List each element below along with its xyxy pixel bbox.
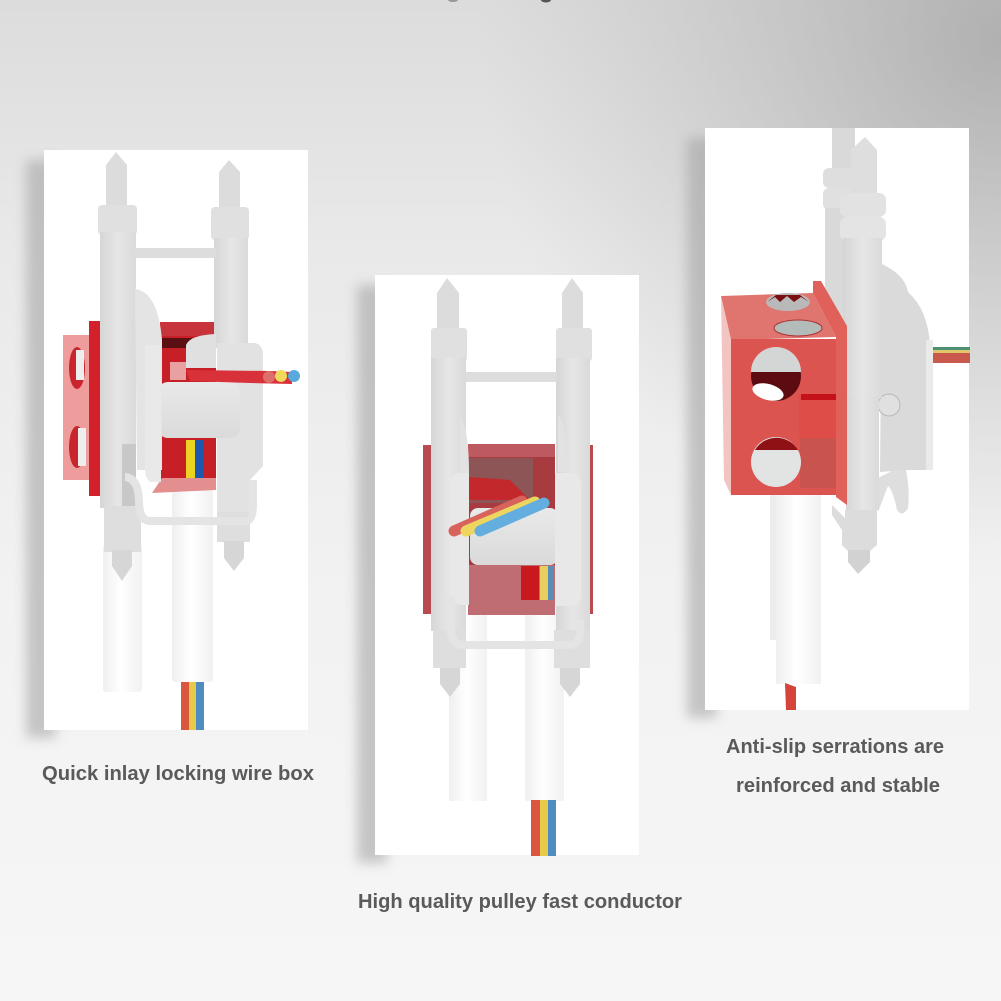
white cylinders and wire xyxy=(103,490,213,730)
crossbar xyxy=(466,372,557,382)
front pin xyxy=(832,137,886,574)
red wire box xyxy=(63,321,216,496)
lower circular hole xyxy=(751,437,801,487)
left pin xyxy=(431,278,467,697)
panel: quick inlay locking wire box xyxy=(44,150,308,730)
retaining clip xyxy=(125,477,253,521)
label: quick inlay: Quick inlay locking wire box xyxy=(42,763,314,785)
roller xyxy=(158,382,240,438)
side plates xyxy=(450,415,581,606)
white cylinder and wire xyxy=(770,490,821,710)
wire cable tips xyxy=(263,370,300,383)
left side plates xyxy=(122,289,162,506)
top wire xyxy=(186,370,292,384)
upper circular hole xyxy=(750,347,801,404)
panel shadows xyxy=(26,138,717,863)
retaining clip xyxy=(451,596,580,645)
top serrated hole xyxy=(766,293,810,311)
side plate with clip xyxy=(878,264,933,514)
upper guide block xyxy=(186,334,216,368)
top round hole xyxy=(774,320,822,336)
panel: high quality pulley xyxy=(375,275,639,856)
roller xyxy=(470,508,558,565)
label: anti-slip line 1: Anti-slip serrations are xyxy=(726,736,944,758)
label: high quality: High quality pulley fast conductor xyxy=(358,891,682,913)
left pin xyxy=(98,152,141,581)
white cylinders and wire xyxy=(449,605,564,856)
right pin xyxy=(554,278,592,697)
back pin xyxy=(823,128,869,318)
right side plate xyxy=(216,343,263,512)
red box xyxy=(721,281,847,505)
right pin xyxy=(211,160,250,571)
red wire box xyxy=(423,444,593,615)
wires xyxy=(454,501,544,531)
label: anti-slip line 2: reinforced and stable xyxy=(736,775,940,797)
top edge fragments xyxy=(448,0,551,2)
crossbar xyxy=(135,248,216,258)
panel: anti-slip serrations xyxy=(705,128,970,710)
side wire xyxy=(930,347,970,363)
